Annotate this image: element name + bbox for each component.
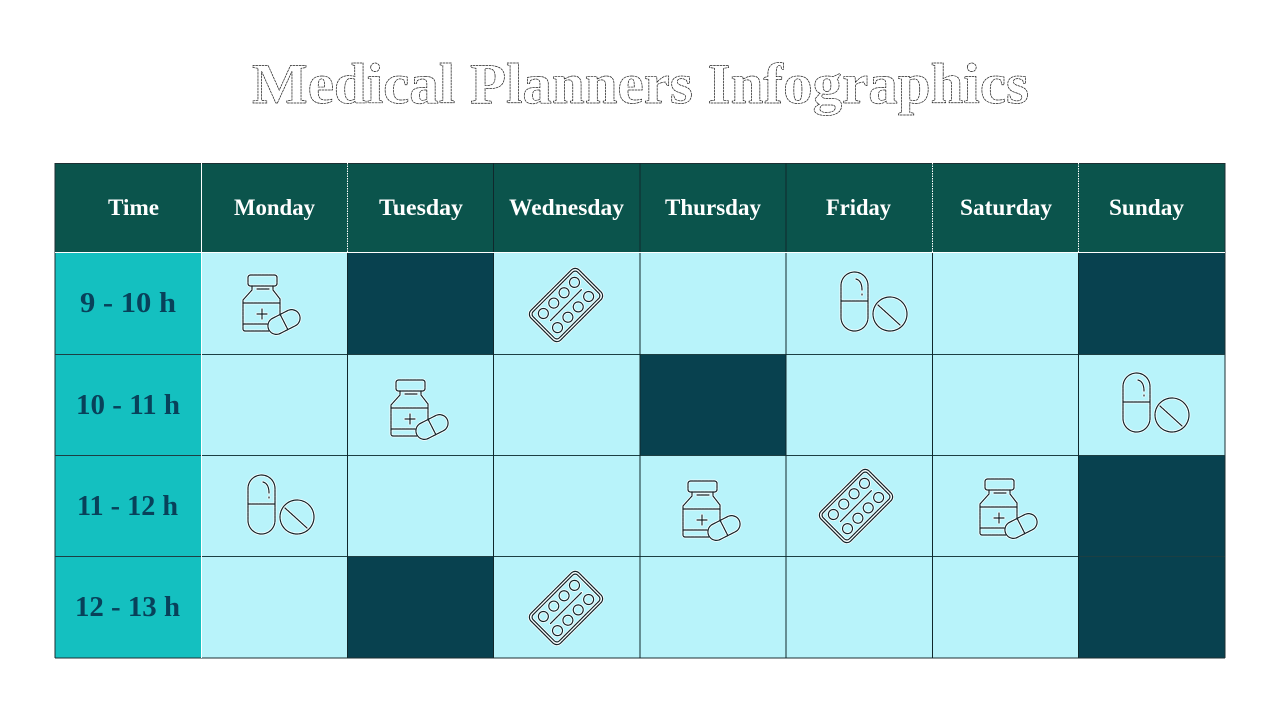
icon: medicine bottle, Monday 9-10 bbox=[243, 275, 303, 337]
time labels: 12 - 13 h bbox=[75, 591, 180, 623]
time column background bbox=[55, 252, 201, 658]
header labels bbox=[108, 195, 1184, 220]
header labels: Monday bbox=[234, 195, 315, 220]
planner table bbox=[55, 163, 1225, 658]
header labels: Thursday bbox=[665, 195, 762, 220]
title: Medical Planners Infographics bbox=[252, 53, 1029, 116]
header labels: Time bbox=[108, 195, 159, 220]
icon: blister pack, Wednesday 9-10 bbox=[527, 266, 605, 344]
icon: medicine bottle, Saturday 11-12 bbox=[980, 479, 1040, 541]
time labels: 9 - 10 h bbox=[80, 287, 176, 319]
blocked slot: Sunday 11-12 and 12-13 bbox=[1078, 455, 1225, 658]
icon: blister pack, Wednesday 12-13 bbox=[527, 569, 605, 647]
time labels bbox=[75, 287, 180, 623]
header labels: Tuesday bbox=[379, 195, 464, 220]
time labels: 10 - 11 h bbox=[76, 389, 180, 421]
header labels: Saturday bbox=[960, 195, 1052, 220]
header labels: Sunday bbox=[1109, 195, 1184, 220]
header labels: Friday bbox=[826, 195, 891, 220]
blocked slot: Thursday 10-11 bbox=[640, 354, 786, 455]
icon: capsule and tablet, Sunday 10-11 bbox=[1123, 373, 1189, 432]
icon: medicine bottle, Tuesday 10-11 bbox=[391, 380, 451, 442]
blocked slot: Tuesday 12-13 bbox=[348, 556, 494, 658]
grid lines bbox=[55, 163, 1225, 658]
cell area background bbox=[201, 252, 1225, 658]
icon: medicine bottle, Thursday 11-12 bbox=[683, 481, 743, 543]
header labels: Wednesday bbox=[509, 195, 624, 220]
header row background bbox=[55, 163, 1225, 252]
blocked slot: Tuesday 9-10 bbox=[348, 252, 494, 354]
icon: capsule and tablet, Monday 11-12 bbox=[248, 475, 314, 534]
icon: blister pack, Friday 11-12 bbox=[817, 467, 895, 545]
icon: capsule and tablet, Friday 9-10 bbox=[841, 272, 907, 331]
blocked slot: Sunday 9-10 bbox=[1078, 252, 1225, 354]
time labels: 11 - 12 h bbox=[77, 490, 178, 522]
